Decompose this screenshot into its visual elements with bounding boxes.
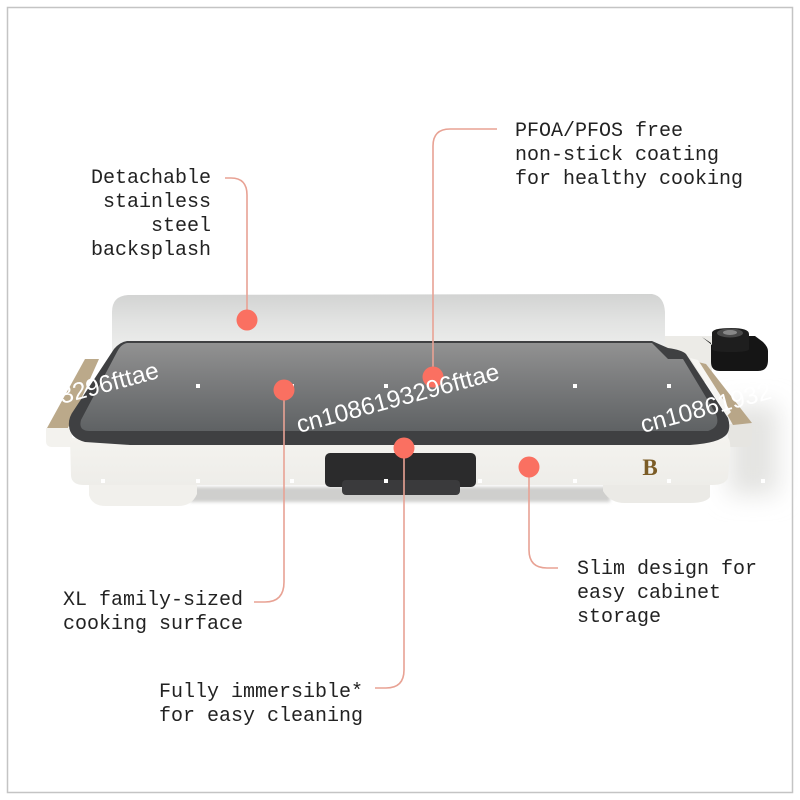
watermark text: cn1086193296fttae (294, 359, 502, 439)
white base (70, 438, 730, 485)
backsplash label: steel (151, 215, 211, 238)
backsplash label: stainless (103, 191, 211, 214)
griddle cooking surface (80, 343, 717, 431)
brand logo B: B (642, 455, 658, 480)
slim design label: storage (577, 606, 661, 629)
coating label: for healthy cooking (515, 168, 743, 191)
shadow (190, 405, 778, 502)
watermark text: 3296fttae (57, 357, 162, 410)
dark griddle rim (69, 341, 729, 445)
watermark text (57, 357, 774, 439)
callout: backsplash (91, 167, 258, 330)
backsplash label: backsplash (91, 239, 211, 262)
product: electric griddle (46, 294, 778, 506)
right foot (603, 485, 710, 503)
slim design label: easy cabinet (577, 582, 721, 605)
stainless steel backsplash (112, 294, 665, 356)
callout: slim design (518, 456, 757, 629)
coating label: PFOA/PFOS free (515, 120, 683, 143)
cooking surface label: XL family-sized (63, 589, 243, 612)
immersible label: Fully immersible* (159, 681, 363, 704)
left foot (89, 485, 197, 506)
backsplash label: Detachable (91, 167, 211, 190)
temperature control knob (702, 328, 768, 371)
callout: cooking surface (63, 380, 294, 636)
front drip tray slot (325, 453, 476, 495)
cooking surface label: cooking surface (63, 613, 243, 636)
callout: immersible (159, 438, 414, 728)
coating label: non-stick coating (515, 144, 719, 167)
callout: coating (422, 120, 743, 388)
immersible label: for easy cleaning (159, 705, 363, 728)
right rear body (662, 336, 712, 382)
watermark text: cn10861932 (638, 378, 774, 439)
watermark dots (101, 384, 765, 483)
right side handle (690, 358, 752, 447)
left side handle (46, 359, 99, 447)
slim design label: Slim design for (577, 558, 757, 581)
